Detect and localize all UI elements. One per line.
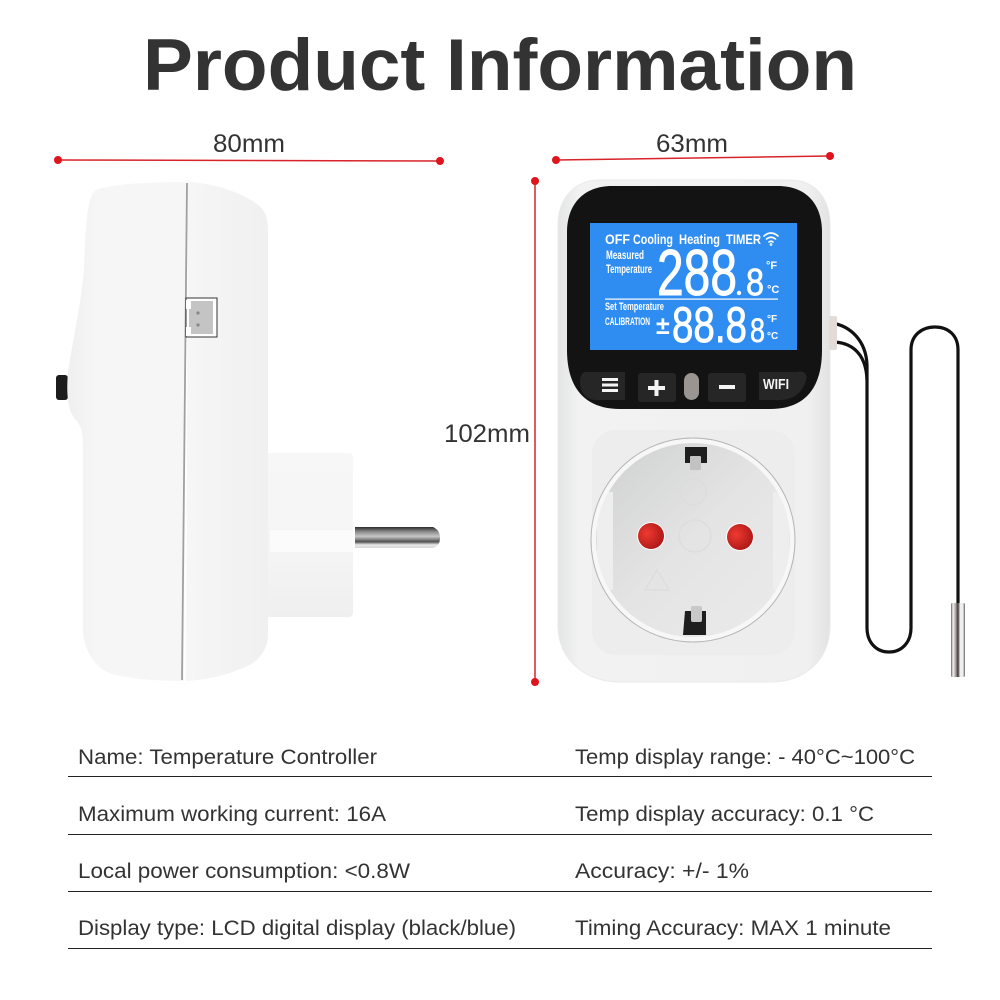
row 3: Accuracy: +/- 1% [575, 859, 749, 883]
LCD mode labels: Cooling [633, 231, 673, 247]
dimension: height 102mm: 102mm [444, 420, 530, 448]
socket [591, 438, 795, 642]
front housing [186, 182, 268, 681]
LCD mode labels: OFF [605, 231, 630, 247]
socket holes [637, 522, 754, 551]
sensor port [186, 298, 217, 337]
LCD set temperature labels: Set Temperature [605, 301, 664, 313]
LCD set value: 88.8 [672, 297, 747, 353]
LCD set temperature labels: CALIBRATION [605, 316, 650, 328]
row 3 [68, 859, 932, 892]
side ledges [597, 492, 789, 590]
LCD set value: °F [767, 314, 777, 325]
row 4: Timing Accuracy: MAX 1 minute [575, 916, 891, 940]
dimension: width 80mm [54, 130, 444, 165]
dimension: height 102mm [444, 177, 539, 686]
spec table [68, 745, 932, 948]
sensor cable and probe [832, 323, 965, 677]
button: minus [708, 373, 746, 402]
title: Product Information [143, 25, 857, 106]
LCD measured temperature label: Measured [606, 248, 644, 262]
LCD mode labels [605, 231, 761, 247]
black display bezel [567, 186, 822, 409]
LCD set value: ± [656, 312, 670, 340]
LCD measured value: 288 [657, 236, 737, 309]
probe tip [951, 603, 965, 677]
button: wifi [759, 371, 807, 400]
row 1 [68, 745, 932, 776]
LCD divider [605, 298, 778, 300]
bottom earth clip [683, 606, 706, 635]
plug pin [355, 527, 440, 548]
LCD screen [590, 223, 797, 353]
LCD measured temperature label [606, 248, 652, 276]
button: plus [638, 373, 676, 402]
emboss marks [645, 479, 711, 590]
top earth clip [685, 447, 707, 470]
icon: side button [56, 375, 68, 400]
dimension: width 63mm [552, 130, 834, 164]
plug cylinder [266, 453, 353, 617]
connector [829, 316, 837, 350]
device body [558, 180, 830, 682]
LCD mode labels: TIMER [726, 231, 761, 247]
indicator light [684, 373, 699, 400]
LCD measured value: °C [767, 284, 779, 296]
button: menu [580, 372, 625, 400]
socket recess [592, 430, 795, 655]
icon: wifi [764, 233, 778, 245]
LCD mode labels: Heating [679, 231, 720, 247]
row 4 [68, 916, 932, 948]
LCD measured value: 8 [746, 262, 764, 304]
seam [182, 183, 187, 680]
rear housing [67, 182, 186, 681]
dimension: width 80mm: 80mm [213, 130, 285, 158]
row 4: Display type: LCD digital display (black/blue) [78, 916, 516, 940]
LCD set value: °C [767, 331, 778, 342]
row 2: Temp display accuracy: 0.1 °C [575, 802, 874, 826]
row 3: Local power consumption: <0.8W [78, 859, 411, 883]
dimension: width 63mm: 63mm [656, 130, 728, 158]
LCD measured temperature label: Temperature [606, 262, 652, 276]
row 2: Maximum working current: 16A [78, 802, 387, 826]
LCD measured value: °F [766, 260, 777, 272]
LCD set value: 8 [750, 312, 765, 350]
button: wifi: WIFI [763, 376, 789, 393]
row 1: Temp display range: - 40°C~100°C [575, 745, 915, 769]
LCD set temperature labels [605, 301, 664, 328]
side view of device [56, 182, 440, 681]
front view of device [558, 180, 837, 682]
row 1: Name: Temperature Controller [78, 745, 377, 769]
row 2 [68, 802, 932, 834]
